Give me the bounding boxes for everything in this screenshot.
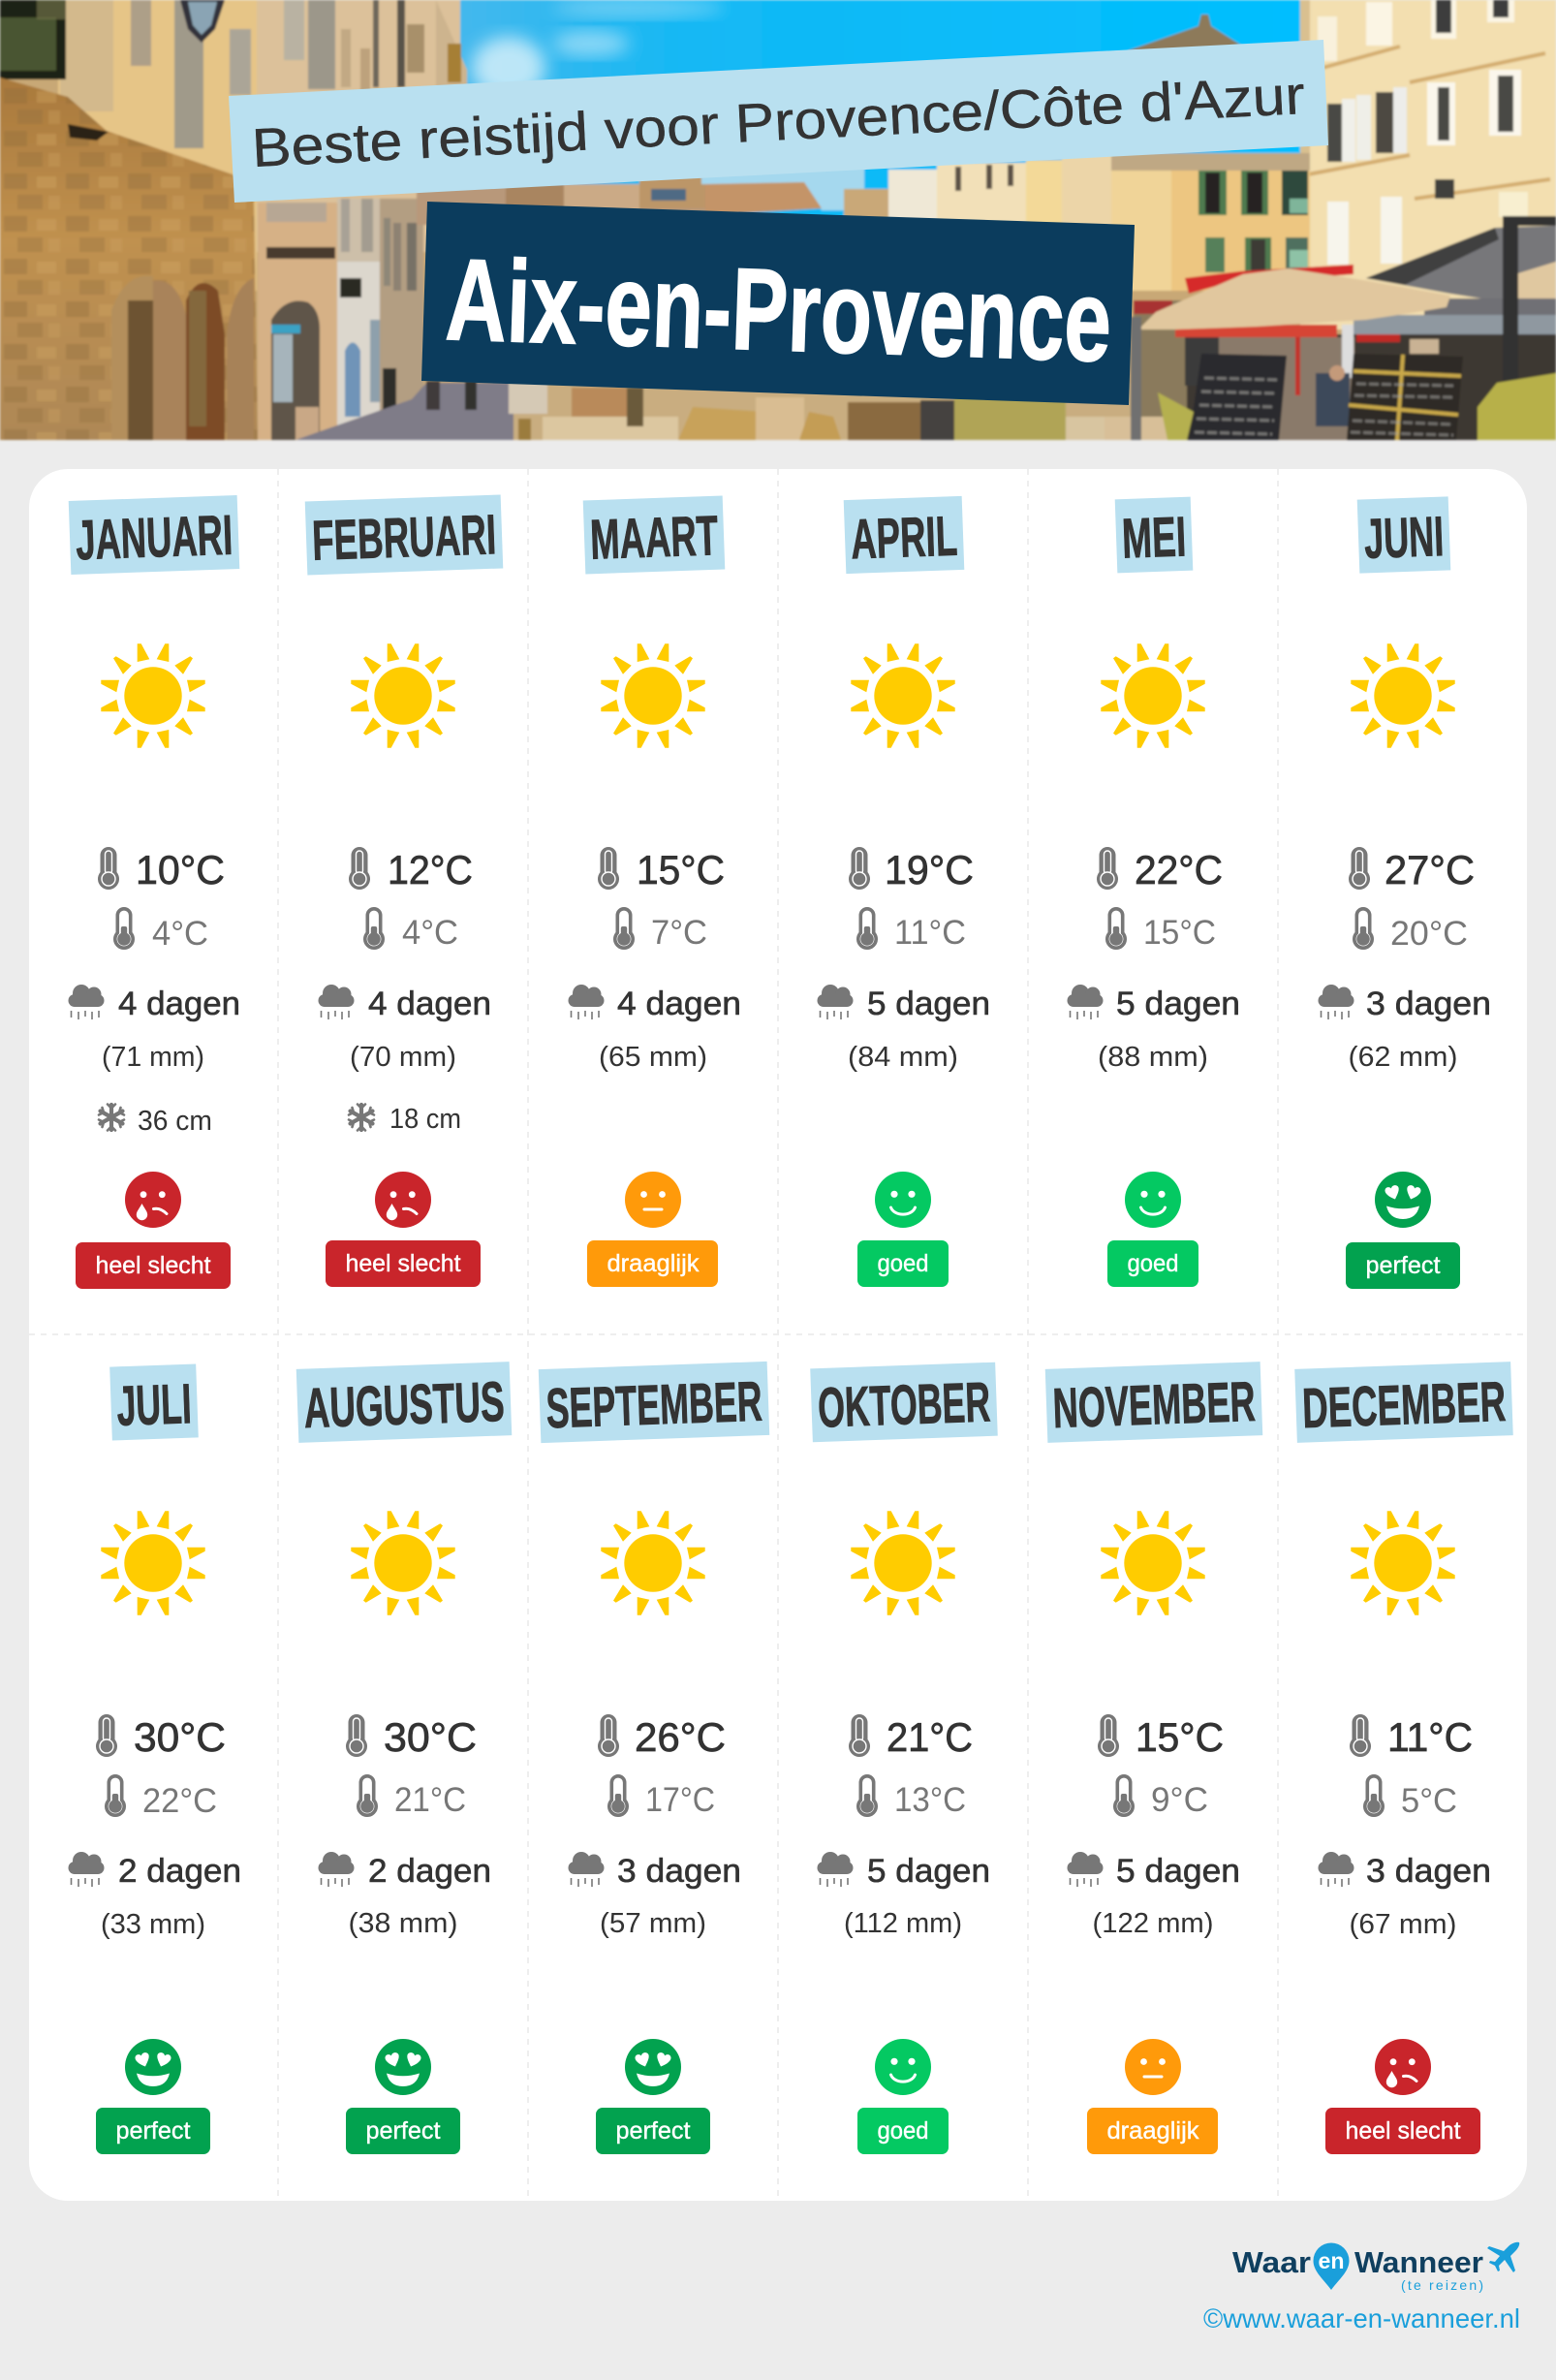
snow <box>99 1105 212 1137</box>
subtitle text: Beste reistijd voor Provence/Côte d'Azur <box>250 64 1306 178</box>
max temperature: 22°C <box>1135 847 1223 892</box>
icon: sun <box>1101 643 1205 748</box>
rain days: 5 dagen <box>1116 1853 1240 1890</box>
icon: sun <box>1351 1511 1455 1615</box>
panel: april <box>818 496 990 1287</box>
precipitation: (112 mm) <box>844 1908 962 1939</box>
sky and clouds <box>426 0 1308 233</box>
icon: sun <box>351 643 455 748</box>
rain days <box>318 985 491 1022</box>
rating badge: heel slecht <box>1345 2117 1461 2145</box>
icon: map pin <box>1314 2242 1349 2290</box>
min temperature <box>358 1776 466 1819</box>
right cream building <box>1300 0 1556 329</box>
panel: november <box>1045 1362 1262 2154</box>
red canopy <box>1185 265 1354 294</box>
rain days: 3 dagen <box>617 1853 741 1890</box>
rain days: 2 dagen <box>118 1853 241 1890</box>
panel: augustus <box>296 1362 512 2154</box>
rating badge <box>1346 1242 1460 1289</box>
rain days <box>568 1852 741 1890</box>
rain days: 4 dagen <box>118 986 240 1022</box>
min temperature: 13°C <box>894 1781 966 1819</box>
min temperature <box>1365 1776 1457 1820</box>
panel: oktober <box>810 1362 998 2154</box>
precipitation: (88 mm) <box>1098 1042 1208 1073</box>
min temperature <box>107 1776 217 1820</box>
arched doors <box>111 275 153 440</box>
rain days <box>68 985 240 1022</box>
rain days <box>318 1852 491 1890</box>
month heading: JUNI <box>1363 505 1445 571</box>
min temperature: 11°C <box>894 914 966 952</box>
month heading: OKTOBER <box>817 1370 991 1440</box>
precipitation: (71 mm) <box>102 1042 204 1073</box>
rating badge <box>1107 1240 1198 1287</box>
icon: sun <box>1101 1511 1205 1615</box>
max temperature: 30°C <box>384 1714 477 1760</box>
rain days: 3 dagen <box>1366 986 1491 1022</box>
icon: rating face <box>1125 1172 1181 1228</box>
max temperature <box>349 847 473 892</box>
icon: sun <box>1351 643 1455 748</box>
min temperature: 4°C <box>402 914 458 952</box>
max temperature <box>346 1714 477 1760</box>
street <box>296 383 523 440</box>
month heading: AUGUSTUS <box>303 1370 506 1440</box>
rating badge: perfect <box>366 2117 441 2145</box>
month heading <box>69 495 239 575</box>
ivy <box>0 0 66 79</box>
rating badge: perfect <box>616 2117 691 2145</box>
icon: rating face <box>1375 1172 1431 1228</box>
distant roofs <box>417 184 707 225</box>
max temperature: 15°C <box>1136 1714 1224 1760</box>
precipitation: (65 mm) <box>599 1042 707 1073</box>
rating badge: perfect <box>116 2117 191 2145</box>
rating badge <box>857 1240 949 1287</box>
min temperature: 22°C <box>142 1782 217 1820</box>
precipitation: (57 mm) <box>600 1908 706 1939</box>
month heading <box>296 1362 512 1443</box>
min temperature <box>1354 909 1468 953</box>
min temperature: 9°C <box>1151 1781 1208 1819</box>
month heading <box>1045 1362 1262 1443</box>
rating badge: goed <box>878 1250 928 1277</box>
min temperature <box>615 909 707 952</box>
panel: juni <box>1318 496 1491 1289</box>
rating badge: draaglijk <box>1106 2117 1199 2145</box>
rating badge <box>96 2108 210 2154</box>
panel: september <box>539 1362 769 2154</box>
rating badge: draaglijk <box>607 1250 700 1277</box>
panel: maart <box>568 496 741 1287</box>
max temperature: 15°C <box>637 847 725 892</box>
subtitle banner <box>229 40 1328 203</box>
min temperature <box>609 1776 715 1819</box>
min temperature <box>115 909 208 953</box>
rating badge: goed <box>1128 1250 1178 1277</box>
panel: juli <box>68 1363 241 2154</box>
rating badge: heel slecht <box>345 1250 461 1277</box>
precipitation: (38 mm) <box>349 1908 457 1939</box>
icon: sun <box>851 643 955 748</box>
precipitation: (67 mm) <box>1349 1909 1457 1940</box>
icon: airplane <box>1487 2242 1519 2272</box>
rain days <box>1318 985 1491 1022</box>
month heading: MEI <box>1121 505 1187 571</box>
dark awning <box>1366 226 1556 310</box>
max temperature <box>1350 1714 1473 1760</box>
rating badge <box>326 1240 481 1287</box>
min temperature: 21°C <box>394 1781 466 1819</box>
rain days: 5 dagen <box>867 1853 990 1890</box>
icon: rating face <box>1375 2039 1431 2095</box>
max temperature <box>598 847 725 892</box>
stone wall <box>0 78 258 440</box>
precipitation: (33 mm) <box>101 1909 205 1940</box>
icon: rating face <box>875 1172 931 1228</box>
min temperature <box>365 909 458 952</box>
white building <box>337 199 380 262</box>
icon: map pin: en <box>1318 2248 1345 2273</box>
rating badge: goed <box>878 2117 928 2145</box>
rating badge <box>1087 2108 1218 2154</box>
month heading <box>1115 497 1193 573</box>
month heading: NOVEMBER <box>1052 1370 1257 1440</box>
min temperature: 7°C <box>651 914 707 952</box>
icon: sun <box>851 1511 955 1615</box>
min temperature: 20°C <box>1390 915 1468 953</box>
rating badge <box>587 1240 718 1287</box>
min temperature: 5°C <box>1401 1782 1457 1820</box>
snow: 36 cm <box>138 1106 212 1137</box>
icon: sun <box>351 1511 455 1615</box>
max temperature: 11°C <box>1387 1714 1473 1760</box>
panel: januari <box>68 495 240 1289</box>
website credit: ©www.waar-en-wanneer.nl <box>1203 2303 1520 2333</box>
min temperature <box>858 1776 966 1819</box>
max temperature: 19°C <box>885 847 974 892</box>
logo: Waar en Wanneer <box>1232 2242 1519 2293</box>
icon: sun <box>601 1511 705 1615</box>
max temperature: 30°C <box>134 1714 226 1760</box>
min temperature <box>1107 909 1216 952</box>
rating badge: perfect <box>1366 1252 1441 1279</box>
max temperature <box>98 847 225 892</box>
icon: rating face <box>625 2039 681 2095</box>
icon: rating face <box>375 2039 431 2095</box>
precipitation: (70 mm) <box>350 1042 456 1073</box>
month heading: APRIL <box>850 505 958 571</box>
logo: Waar en Wanneer: Waar <box>1232 2245 1311 2279</box>
rain days <box>818 1852 990 1890</box>
min temperature <box>1115 1776 1208 1819</box>
month heading <box>305 494 503 576</box>
month heading: JULI <box>115 1372 193 1438</box>
ochre building <box>1111 165 1310 291</box>
icon: rating face <box>375 1172 431 1228</box>
max temperature: 10°C <box>136 847 225 892</box>
icon: rating face <box>125 1172 181 1228</box>
max temperature <box>849 1714 973 1760</box>
chalkboards <box>1189 354 1287 440</box>
icon: rating face <box>875 2039 931 2095</box>
rain days: 4 dagen <box>617 986 741 1022</box>
max temperature: 26°C <box>635 1714 726 1760</box>
frame pole <box>1131 317 1141 440</box>
min temperature: 15°C <box>1143 914 1216 952</box>
rain days <box>1068 985 1240 1022</box>
rain days <box>818 985 990 1022</box>
logo: Waar en Wanneer: Wanneer <box>1354 2245 1483 2279</box>
header photo: street in Aix-en-Provence <box>0 0 1556 440</box>
rain days: 5 dagen <box>1116 986 1240 1022</box>
rating badge <box>346 2108 460 2154</box>
month heading: JANUARI <box>75 504 233 572</box>
rating badge: heel slecht <box>95 1252 211 1279</box>
icon: rating face <box>125 2039 181 2095</box>
precipitation: (122 mm) <box>1093 1908 1213 1939</box>
panel: mei <box>1068 497 1240 1287</box>
rating badge <box>76 1242 231 1289</box>
rain days: 3 dagen <box>1366 1853 1491 1890</box>
rain days: 4 dagen <box>368 986 491 1022</box>
max temperature <box>1098 1714 1224 1760</box>
rain days <box>68 1852 241 1890</box>
rain days: 5 dagen <box>867 986 990 1022</box>
shop building <box>258 203 337 440</box>
month heading <box>539 1362 769 1443</box>
month heading: SEPTEMBER <box>545 1370 763 1440</box>
rating badge <box>596 2108 710 2154</box>
min temperature: 4°C <box>152 915 208 953</box>
rain days <box>1068 1852 1240 1890</box>
month heading <box>583 496 725 574</box>
month heading: FEBRUARI <box>311 503 497 573</box>
rain days <box>1318 1852 1491 1890</box>
min temperature: 17°C <box>645 1781 715 1819</box>
month heading <box>810 1362 998 1442</box>
title banner <box>421 202 1135 405</box>
month heading <box>844 496 964 574</box>
rating badge <box>1325 2108 1480 2154</box>
month heading: MAART <box>589 504 719 572</box>
snow: 18 cm <box>389 1104 461 1135</box>
icon: sun <box>601 643 705 748</box>
icon: rating face <box>625 1172 681 1228</box>
icon: sun <box>101 1511 205 1615</box>
min temperature <box>858 909 966 952</box>
logo: Waar en Wanneer: (te reizen) <box>1401 2277 1483 2293</box>
umbrella <box>1175 325 1337 337</box>
panel: december <box>1294 1362 1513 2154</box>
rain days: 2 dagen <box>368 1853 491 1890</box>
snow <box>349 1104 461 1135</box>
title text: Aix-en-Provence <box>444 235 1113 387</box>
max temperature <box>1097 847 1223 892</box>
max temperature: 21°C <box>887 1714 973 1760</box>
panel: februari <box>305 494 503 1287</box>
max temperature: 12°C <box>388 847 473 892</box>
precipitation: (84 mm) <box>848 1042 958 1073</box>
rating badge <box>857 2108 949 2154</box>
panel: white card with monthly grid <box>29 469 1527 2201</box>
month heading <box>1357 496 1450 574</box>
left upper building <box>58 0 257 291</box>
icon: sun <box>101 643 205 748</box>
max temperature: 27°C <box>1385 847 1475 892</box>
lower cafe terrace <box>513 383 1143 440</box>
precipitation: (62 mm) <box>1349 1042 1457 1073</box>
month heading <box>109 1363 199 1441</box>
icon: rating face <box>1125 2039 1181 2095</box>
plants <box>1478 373 1556 440</box>
rain days <box>568 985 741 1022</box>
